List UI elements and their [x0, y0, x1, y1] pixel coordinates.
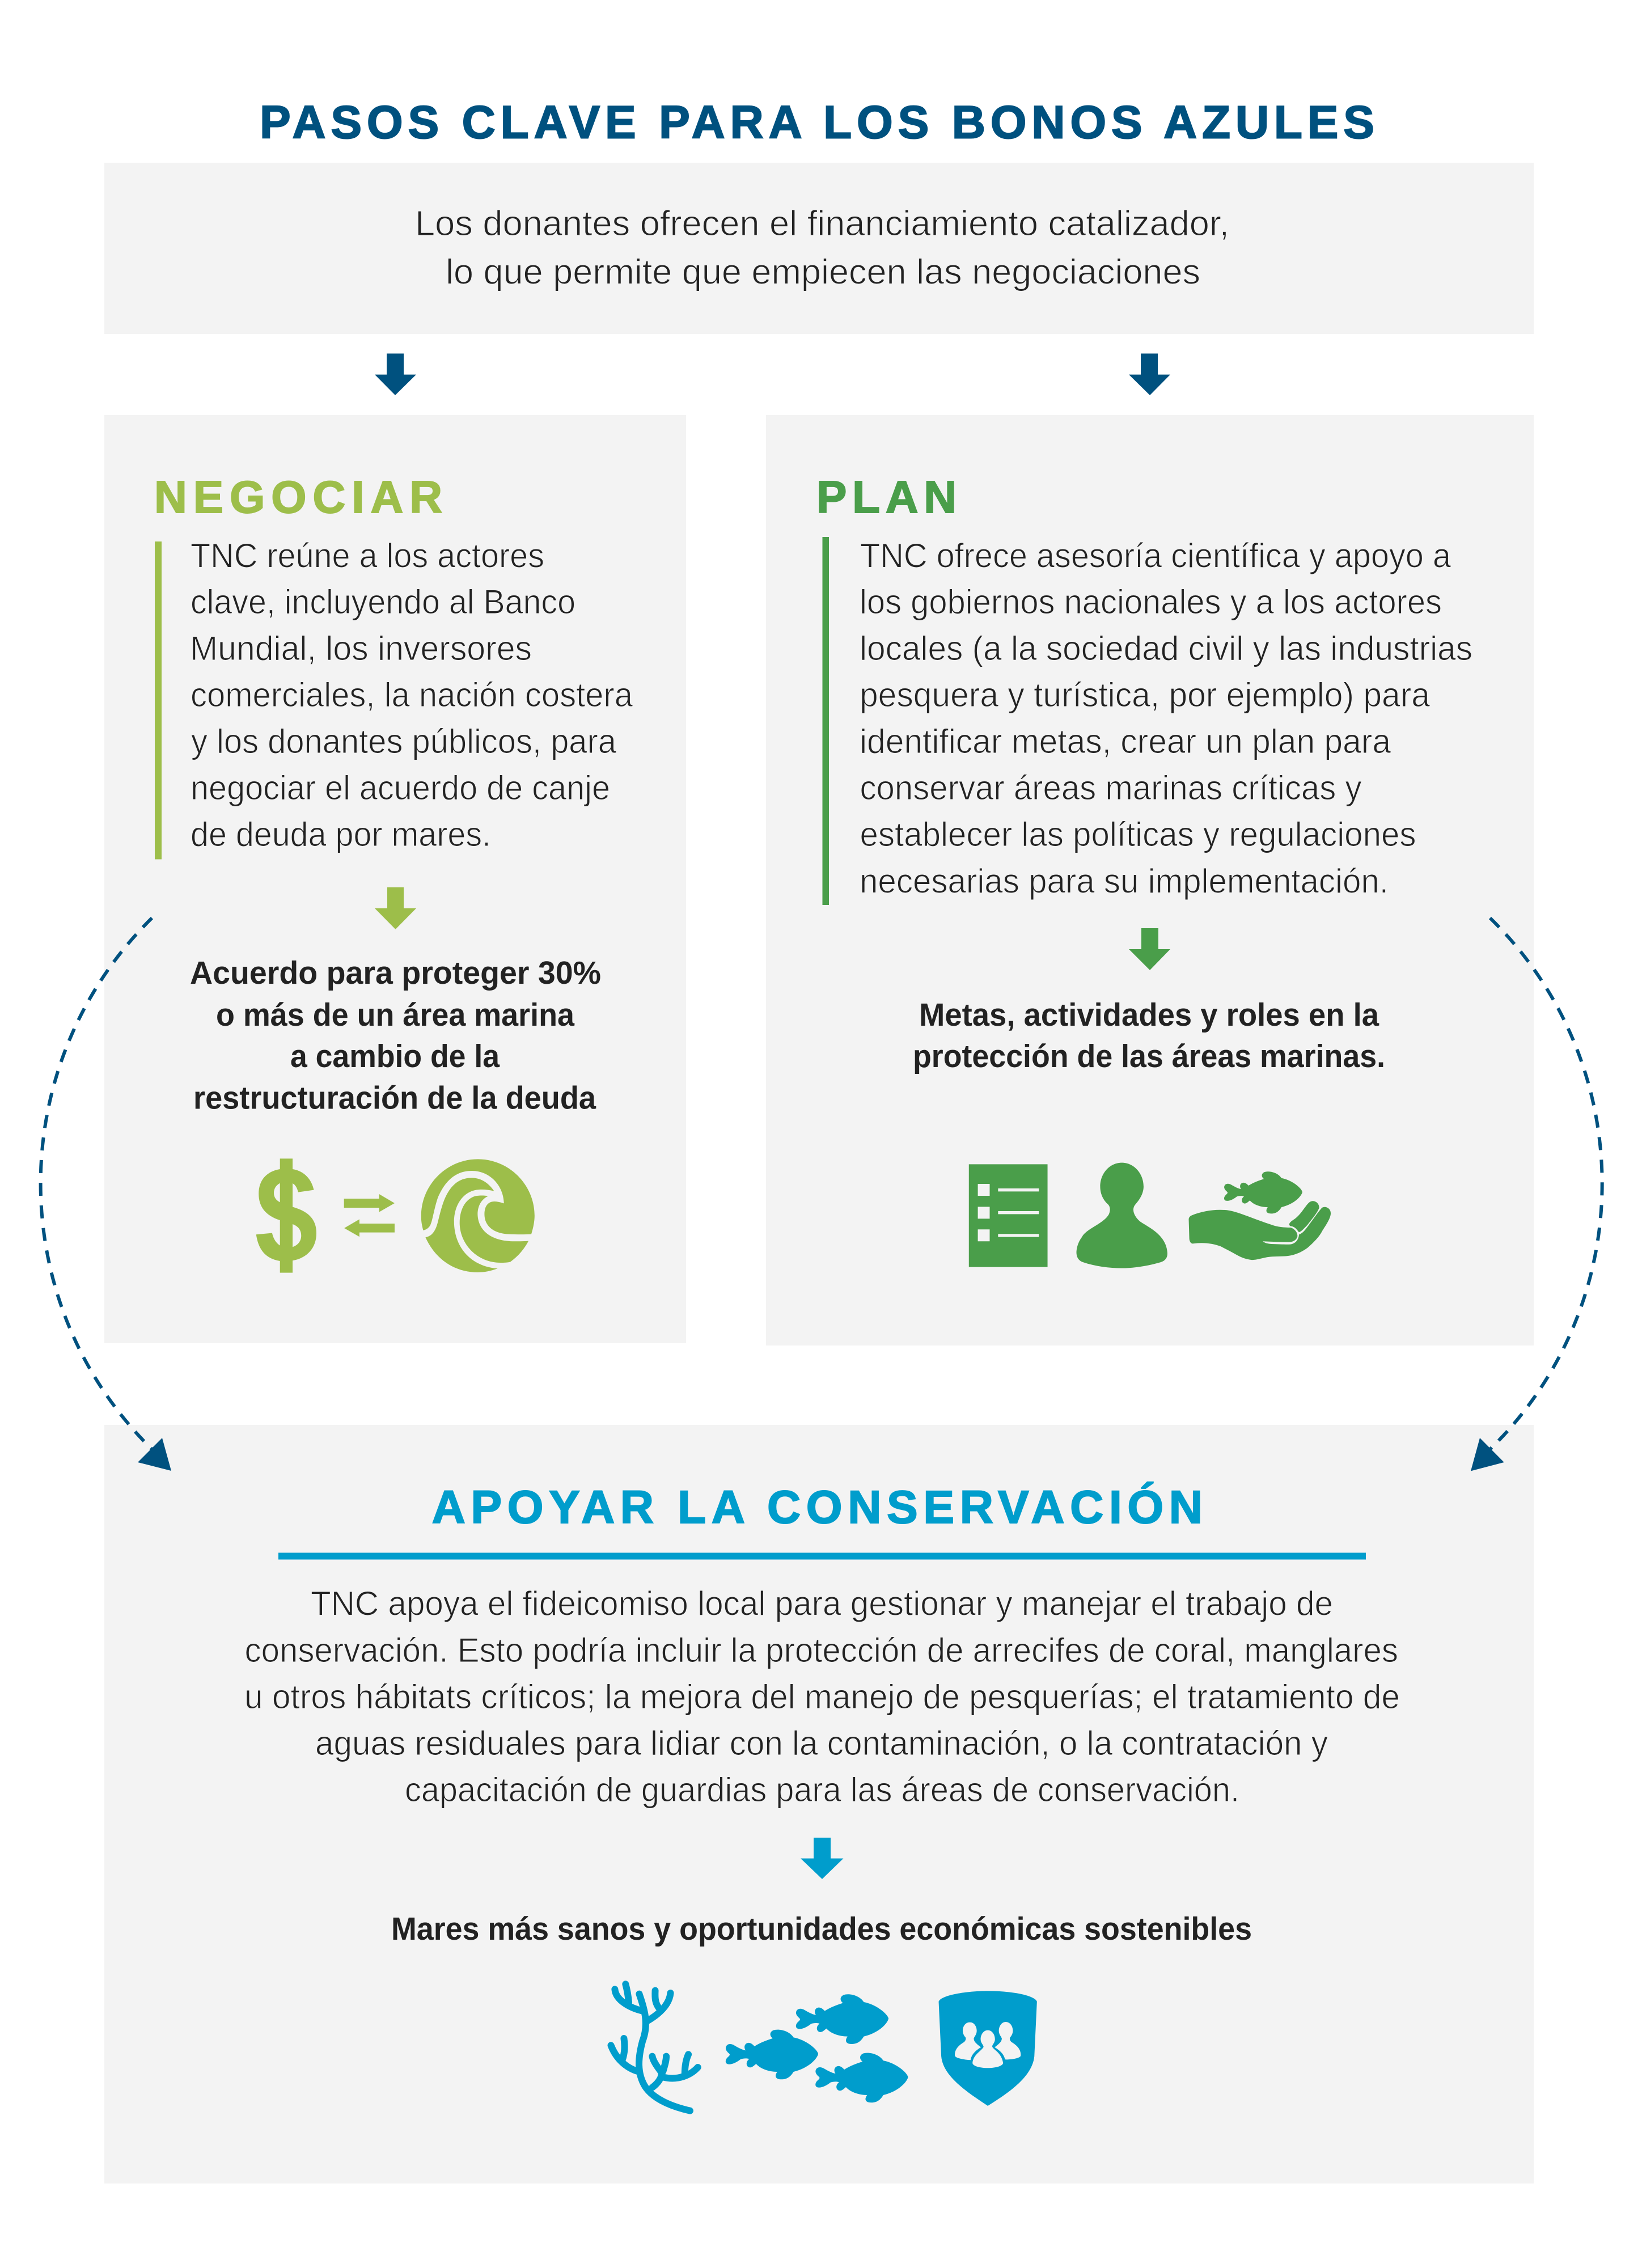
arrow: negociar result [375, 887, 416, 929]
intro text: lo que permite que empiecen las negociaciones [446, 253, 1200, 291]
body text: TNC reúne a los actores [191, 536, 544, 575]
result text: Mares más sanos y oportunidades económicas sostenibles [391, 1911, 1252, 1947]
body text: TNC apoya el fideicomiso local para gestionar y manejar el trabajo de [311, 1585, 1333, 1623]
body text: necesarias para su implementación. [860, 862, 1389, 900]
result text: Acuerdo para proteger 30% [190, 955, 601, 991]
accent bar [822, 537, 829, 905]
intro text: Los donantes ofrecen el financiamiento catalizador, [415, 204, 1229, 243]
body text: conservar áreas marinas críticas y [860, 769, 1362, 807]
body text: clave, incluyendo al Banco [191, 583, 575, 621]
result text [190, 955, 601, 1116]
body text [244, 1585, 1400, 1809]
body text: TNC ofrece asesoría científica y apoyo a [860, 536, 1451, 575]
body text: comerciales, la nación costera [191, 676, 633, 714]
icon: dollar sign [256, 1158, 316, 1273]
body text: locales (a la sociedad civil y las industrias [860, 629, 1472, 667]
heading: plan: PLAN [816, 472, 957, 522]
body text: conservación. Esto podría incluir la protección de arrecifes de coral, manglares [245, 1631, 1398, 1669]
panel: plan [766, 415, 1534, 1345]
arrow: conservation result [801, 1838, 844, 1879]
result text: a cambio de la [290, 1038, 500, 1074]
accent bar [155, 541, 162, 860]
arrow: intro to negociar [375, 354, 416, 395]
dashed arrow: negociar to conservation [41, 918, 171, 1471]
icon: exchange arrows [344, 1194, 395, 1237]
body text: y los donantes públicos, para [191, 722, 617, 760]
result text: protección de las áreas marinas. [913, 1038, 1385, 1074]
heading: apoyar la conservacion: APOYAR LA CONSERVACIÓN [432, 1482, 1203, 1533]
body text: capacitación de guardias para las áreas de conservación. [405, 1771, 1239, 1809]
body text: de deuda por mares. [191, 815, 491, 853]
body text: Mundial, los inversores [190, 629, 532, 667]
title: PASOS CLAVE PARA LOS BONOS AZULES [260, 96, 1374, 149]
icon: wave [421, 1159, 535, 1272]
icon: fish above hand [1224, 1171, 1302, 1213]
result text: o más de un área marina [216, 997, 575, 1033]
result text: Metas, actividades y roles en la [919, 997, 1379, 1033]
body text: u otros hábitats críticos; la mejora del manejo de pesquerías; el tratamiento de [244, 1678, 1400, 1716]
body text [860, 536, 1472, 900]
arrow: intro to plan [1129, 354, 1170, 395]
body text [190, 536, 633, 853]
body text: pesquera y turística, por ejemplo) para [860, 676, 1431, 714]
body text: los gobiernos nacionales y a los actores [860, 583, 1442, 621]
icon: person [1077, 1163, 1167, 1268]
body text: negociar el acuerdo de canje [191, 769, 610, 807]
icon: coral [611, 1984, 698, 2111]
heading rule [278, 1552, 1366, 1559]
result text: restructuración de la deuda [193, 1080, 596, 1116]
icons: checklist person hand [969, 1163, 1331, 1268]
body text: aguas residuales para lidiar con la contaminación, o la contratación y [315, 1724, 1328, 1762]
icon: three fish [726, 1994, 908, 2102]
panel: apoyar la conservacion [104, 1425, 1534, 2184]
icons: dollar exchange wave [256, 1158, 535, 1273]
result text [913, 997, 1385, 1074]
dashed arrow: plan to conservation [1471, 918, 1602, 1471]
icons: coral fish shield [611, 1984, 1037, 2111]
panel: donors intro [104, 163, 1534, 334]
body text: establecer las políticas y regulaciones [860, 815, 1416, 853]
arrow: plan result [1129, 928, 1170, 970]
icon: hand [1189, 1201, 1331, 1260]
panel: negociar [104, 415, 686, 1343]
intro text [415, 204, 1229, 291]
body text: identificar metas, crear un plan para [860, 722, 1391, 760]
icon: checklist [969, 1164, 1048, 1267]
heading: negociar: NEGOCIAR [154, 472, 442, 522]
icon: community shield [939, 1991, 1037, 2106]
